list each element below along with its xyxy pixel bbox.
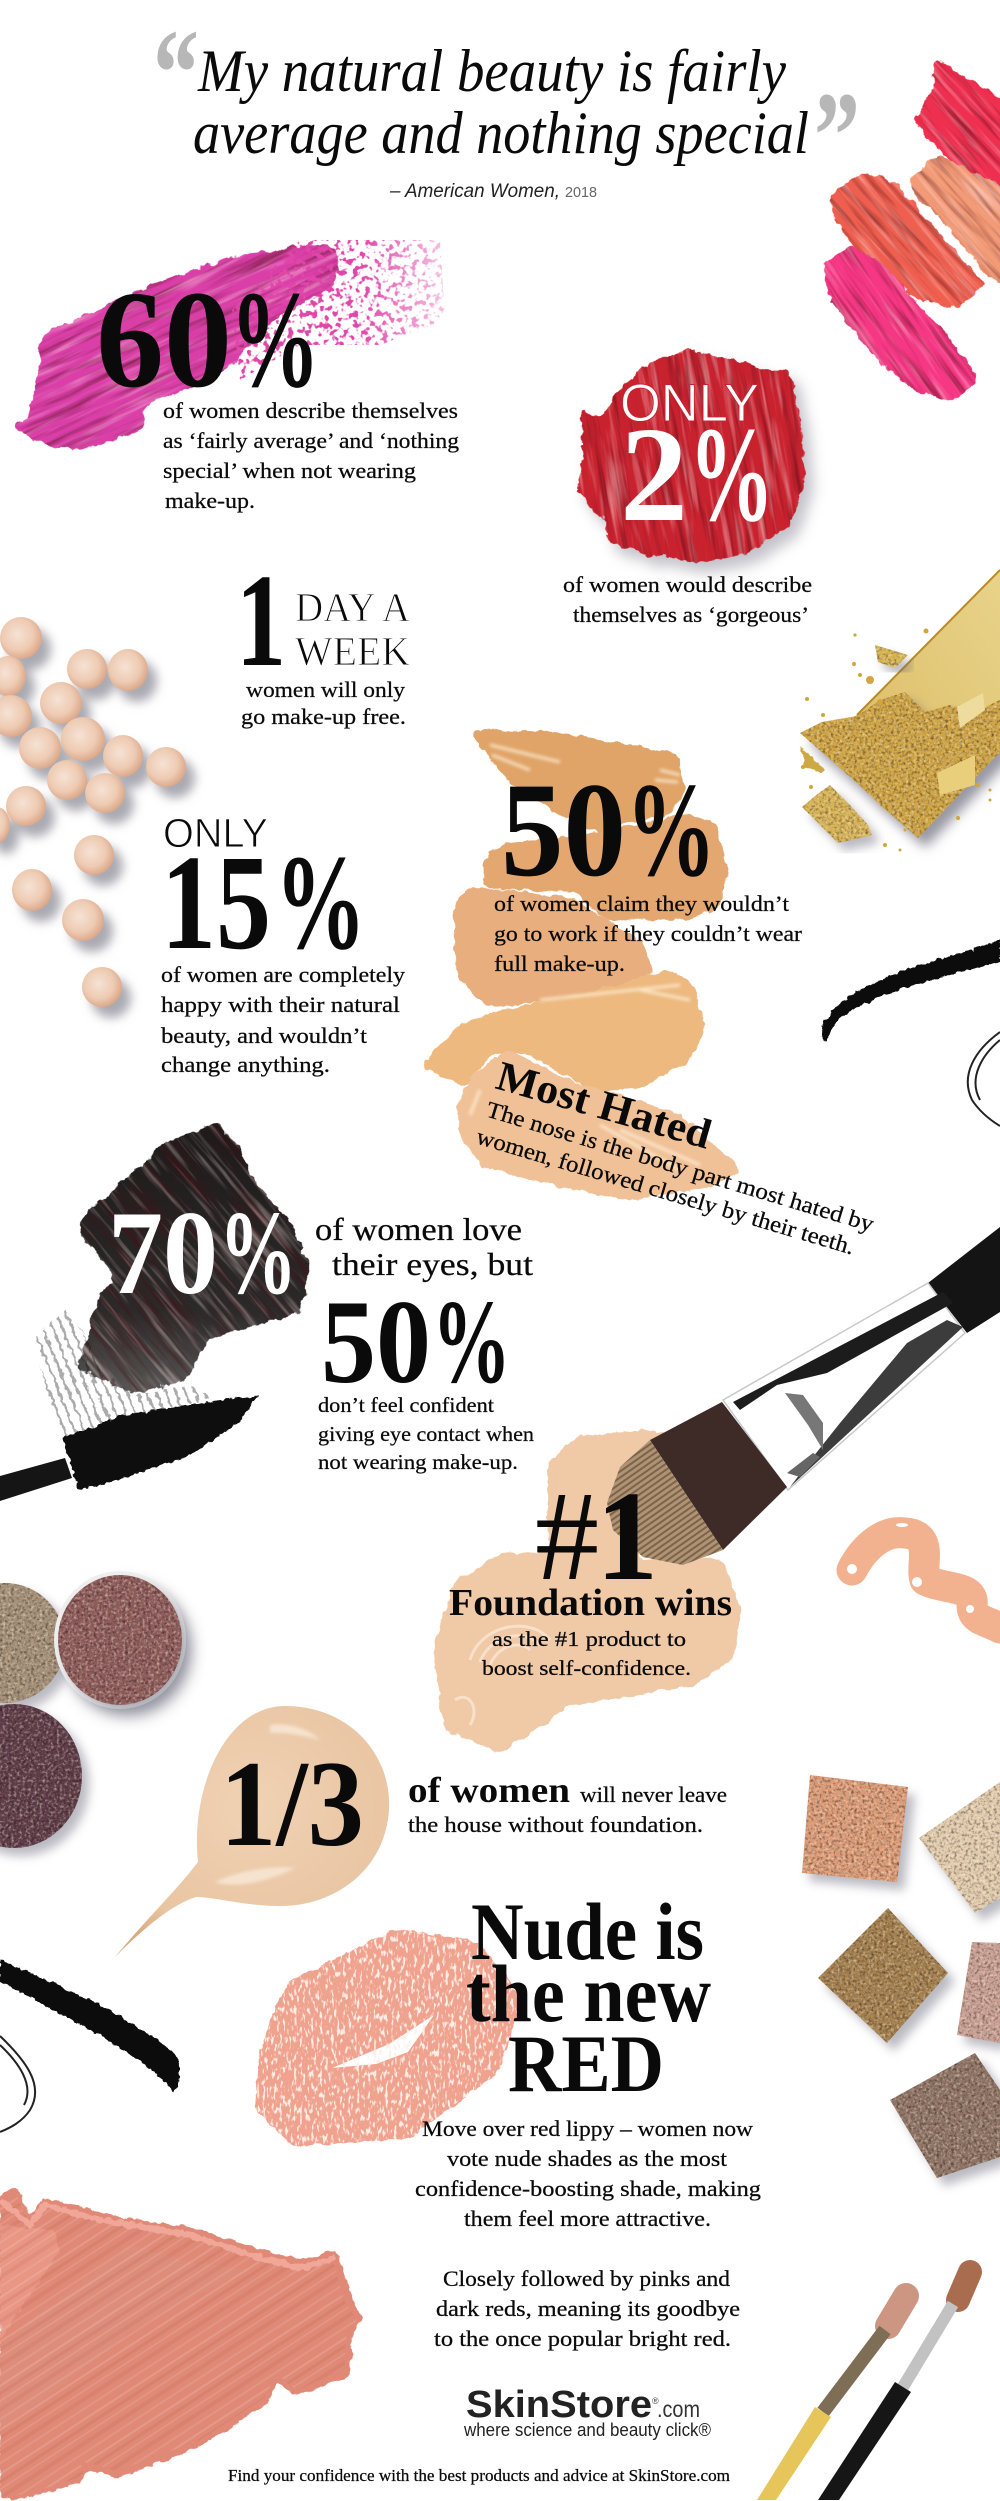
50% caption: of women claim they wouldn’t (494, 891, 789, 916)
panel: 1 day a week (236, 546, 410, 729)
60% figure (96, 263, 320, 417)
skinstore logo: ® (652, 2396, 659, 2406)
nude paragraph two: Closely followed by pinks and (443, 2266, 730, 2291)
50% caption: full make-up. (494, 951, 625, 976)
lip print (250, 1925, 530, 2150)
quote text: My natural beauty is fairly (197, 38, 786, 104)
foundation squiggle (847, 1523, 1000, 1628)
nude paragraph one: vote nude shades as the most (447, 2146, 727, 2171)
2% caption: themselves as ‘gorgeous’ (573, 602, 809, 627)
most hated heading: Most Hated (491, 1053, 716, 1159)
lipstick smears top right (750, 6, 1000, 475)
eye contact caption: giving eye contact when (318, 1422, 535, 1446)
nude paragraph one (415, 2116, 761, 2231)
panel: one third (115, 1706, 727, 1957)
nude heading (466, 1886, 711, 2109)
50% figure: % (626, 756, 716, 905)
foundation swatches (420, 730, 743, 1200)
eyeshadow pots left (0, 1571, 186, 1848)
2% figure: % (689, 400, 774, 550)
nude heading: Nude is (471, 1886, 704, 1977)
panel: 50 percent work (494, 756, 803, 976)
50% figure: 50 (321, 1275, 431, 1408)
eye contact caption (318, 1393, 535, 1474)
one third caption: the house without foundation. (408, 1812, 703, 1837)
nude heading: RED (508, 2018, 664, 2109)
60% caption: make-up. (165, 488, 255, 513)
15% figure (161, 828, 366, 978)
big numeral 1: 1 (236, 546, 286, 694)
attribution: 2018 (565, 184, 597, 201)
2% caption (563, 572, 812, 627)
nude paragraph one: Move over red lippy – women now (422, 2116, 753, 2141)
foundation caption: as the #1 product to (492, 1627, 686, 1651)
50% caption: go to work if they couldn’t wear (494, 921, 803, 946)
eyelash stroke top right (820, 940, 1000, 1126)
50% figure (321, 1275, 511, 1408)
foundation smear (434, 1431, 740, 1753)
2% figure (620, 400, 774, 550)
eyeshadow squares right (802, 1775, 1000, 2178)
panel: only 15 percent (161, 810, 405, 1077)
15% caption: of women are completely (161, 962, 405, 987)
60% caption: of women describe themselves (163, 398, 458, 423)
only label: ONLY (620, 374, 759, 433)
only label: ONLY (163, 810, 268, 856)
foundation brush (607, 1227, 1000, 1565)
panel: 70 percent eyes (0, 1008, 535, 1508)
70% figure: 70 (108, 1186, 218, 1319)
closing quotation mark: ” (814, 68, 860, 206)
1 day caption: go make-up free. (241, 704, 406, 729)
pearl beads (0, 617, 186, 1007)
15% figure: 15 (161, 828, 271, 978)
eyeshadow brush (757, 2296, 906, 2500)
eye contact caption: don’t feel confident (318, 1393, 494, 1417)
panel: 60 percent (14, 240, 459, 513)
50% caption (494, 891, 803, 976)
panel: most hated (474, 1053, 877, 1259)
one third caption (408, 1770, 727, 1837)
makeup brushes bottom right (757, 2272, 970, 2500)
day a week label (295, 584, 410, 674)
60% figure: % (230, 263, 320, 417)
eyes statement: their eyes, but (332, 1246, 533, 1282)
footer line: Find your confidence with the best products and advice at SkinStore.com (228, 2466, 730, 2485)
foundation caption: boost self-confidence. (482, 1656, 691, 1680)
nude paragraph two (434, 2266, 740, 2351)
most hated caption: women, followed closely by their teeth. (474, 1124, 857, 1259)
eye contact caption: not wearing make-up. (318, 1450, 518, 1474)
red lipstick disc (542, 311, 841, 602)
60% caption: special’ when not wearing (163, 458, 416, 483)
nude paragraph two: dark reds, meaning its goodbye (436, 2296, 740, 2321)
60% caption (163, 398, 459, 513)
15% caption: beauty, and wouldn’t (161, 1023, 367, 1048)
50% figure (501, 756, 716, 905)
70% figure: % (219, 1186, 297, 1319)
#1 figure: 1 (596, 1465, 658, 1607)
1 day caption: women will only (246, 677, 405, 702)
quote text (193, 38, 809, 166)
day a week label: WEEK (295, 628, 410, 674)
nude paragraph two: to the once popular bright red. (434, 2326, 731, 2351)
15% caption: happy with their natural (161, 992, 400, 1017)
blending brush (818, 2272, 970, 2500)
2% caption: of women would describe (563, 572, 812, 597)
panel: only 2 percent (542, 311, 841, 627)
blush smear bottom left (0, 2187, 365, 2501)
opening quotation mark: “ (153, 5, 199, 143)
nude paragraph one: them feel more attractive. (464, 2206, 711, 2231)
60% caption: as ‘fairly average’ and ‘nothing (163, 428, 459, 453)
70% figure (108, 1186, 297, 1319)
15% caption: change anything. (161, 1052, 330, 1077)
panel: number 1 foundation (449, 1465, 732, 1680)
quote text: average and nothing special (193, 100, 809, 166)
1 day caption (241, 677, 406, 729)
one third caption: of women (408, 1770, 570, 1810)
eyes statement: of women love (315, 1211, 522, 1247)
50% figure: 50 (501, 756, 626, 905)
foundation caption (482, 1627, 691, 1680)
skinstore logo: SkinStore (466, 2384, 652, 2426)
attribution: – American Women, (389, 181, 560, 202)
eyelash stroke left (0, 1960, 180, 2132)
#1 figure: # (535, 1465, 599, 1607)
skinstore logo: where science and beauty click® (463, 2420, 711, 2440)
magenta lipstick smear (14, 240, 444, 451)
60% figure: 60 (96, 263, 232, 417)
skinstore logo (463, 2384, 711, 2440)
nude paragraph one: confidence-boosting shade, making (415, 2176, 761, 2201)
#1 figure (535, 1465, 658, 1607)
day a week label: DAY A (295, 584, 410, 630)
most hated caption: The nose is the body part most hated by (484, 1097, 877, 1237)
50% figure: % (432, 1275, 511, 1408)
skinstore logo: .com (657, 2396, 700, 2422)
mascara swipe (0, 1008, 443, 1508)
mascara wand (0, 1396, 257, 1501)
gold eyeshadow (800, 570, 1000, 852)
one third caption: will never leave (580, 1782, 727, 1807)
foundation wins heading: Foundation wins (449, 1582, 732, 1624)
nude heading: the new (466, 1948, 711, 2039)
2% figure: 2 (620, 400, 688, 550)
panel: nude is the new red (250, 1886, 761, 2351)
15% figure: % (275, 828, 366, 978)
15% caption (161, 962, 405, 1077)
foundation drop (115, 1706, 389, 1957)
header quote (153, 5, 860, 206)
eyes statement (315, 1211, 533, 1282)
1/3 figure: 1/3 (220, 1735, 364, 1872)
